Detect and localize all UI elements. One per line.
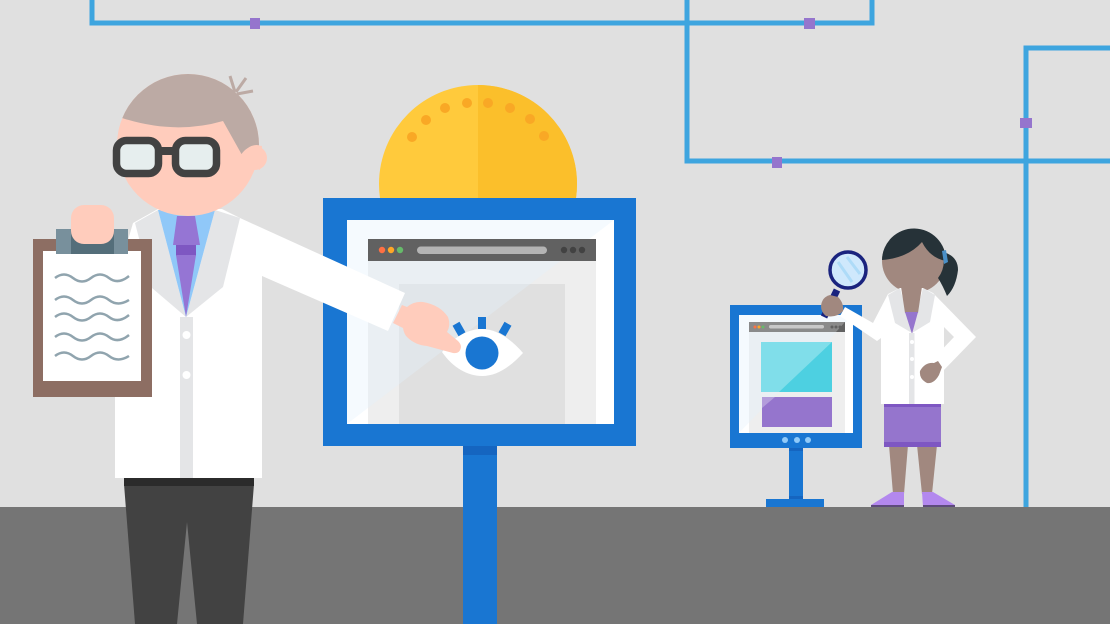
small monitor — [730, 305, 862, 507]
small browser toolbar — [749, 322, 845, 332]
shoes — [871, 492, 955, 507]
monitor screen — [347, 220, 614, 424]
man in lab coat — [33, 70, 461, 624]
skirt — [884, 404, 941, 447]
woman in lab coat — [821, 229, 976, 507]
floor — [0, 507, 1110, 624]
fist on hip — [920, 361, 942, 383]
large monitor — [323, 198, 636, 624]
woman's head — [882, 229, 946, 293]
icon: eye — [442, 317, 523, 376]
tie — [173, 216, 200, 317]
small stand — [766, 448, 824, 507]
wires on the wall — [92, 0, 1110, 507]
hair tie — [942, 250, 948, 264]
woman's coat — [840, 280, 976, 404]
cyan content block — [761, 342, 832, 392]
trousers — [124, 478, 254, 624]
magnifying glass — [824, 252, 866, 317]
yellow half dome — [379, 85, 577, 198]
browser toolbar — [368, 239, 596, 261]
ponytail — [938, 252, 958, 296]
head — [110, 70, 267, 216]
hand holding magnifier — [821, 295, 843, 316]
monitor stand — [463, 446, 497, 624]
clipboard — [33, 205, 152, 397]
lab coat — [115, 209, 405, 478]
legs — [889, 445, 937, 494]
purple content block — [762, 397, 832, 427]
monitor frame — [323, 198, 636, 446]
monitor buttons — [782, 437, 811, 443]
pointing hand — [393, 302, 461, 353]
glasses — [116, 140, 216, 174]
